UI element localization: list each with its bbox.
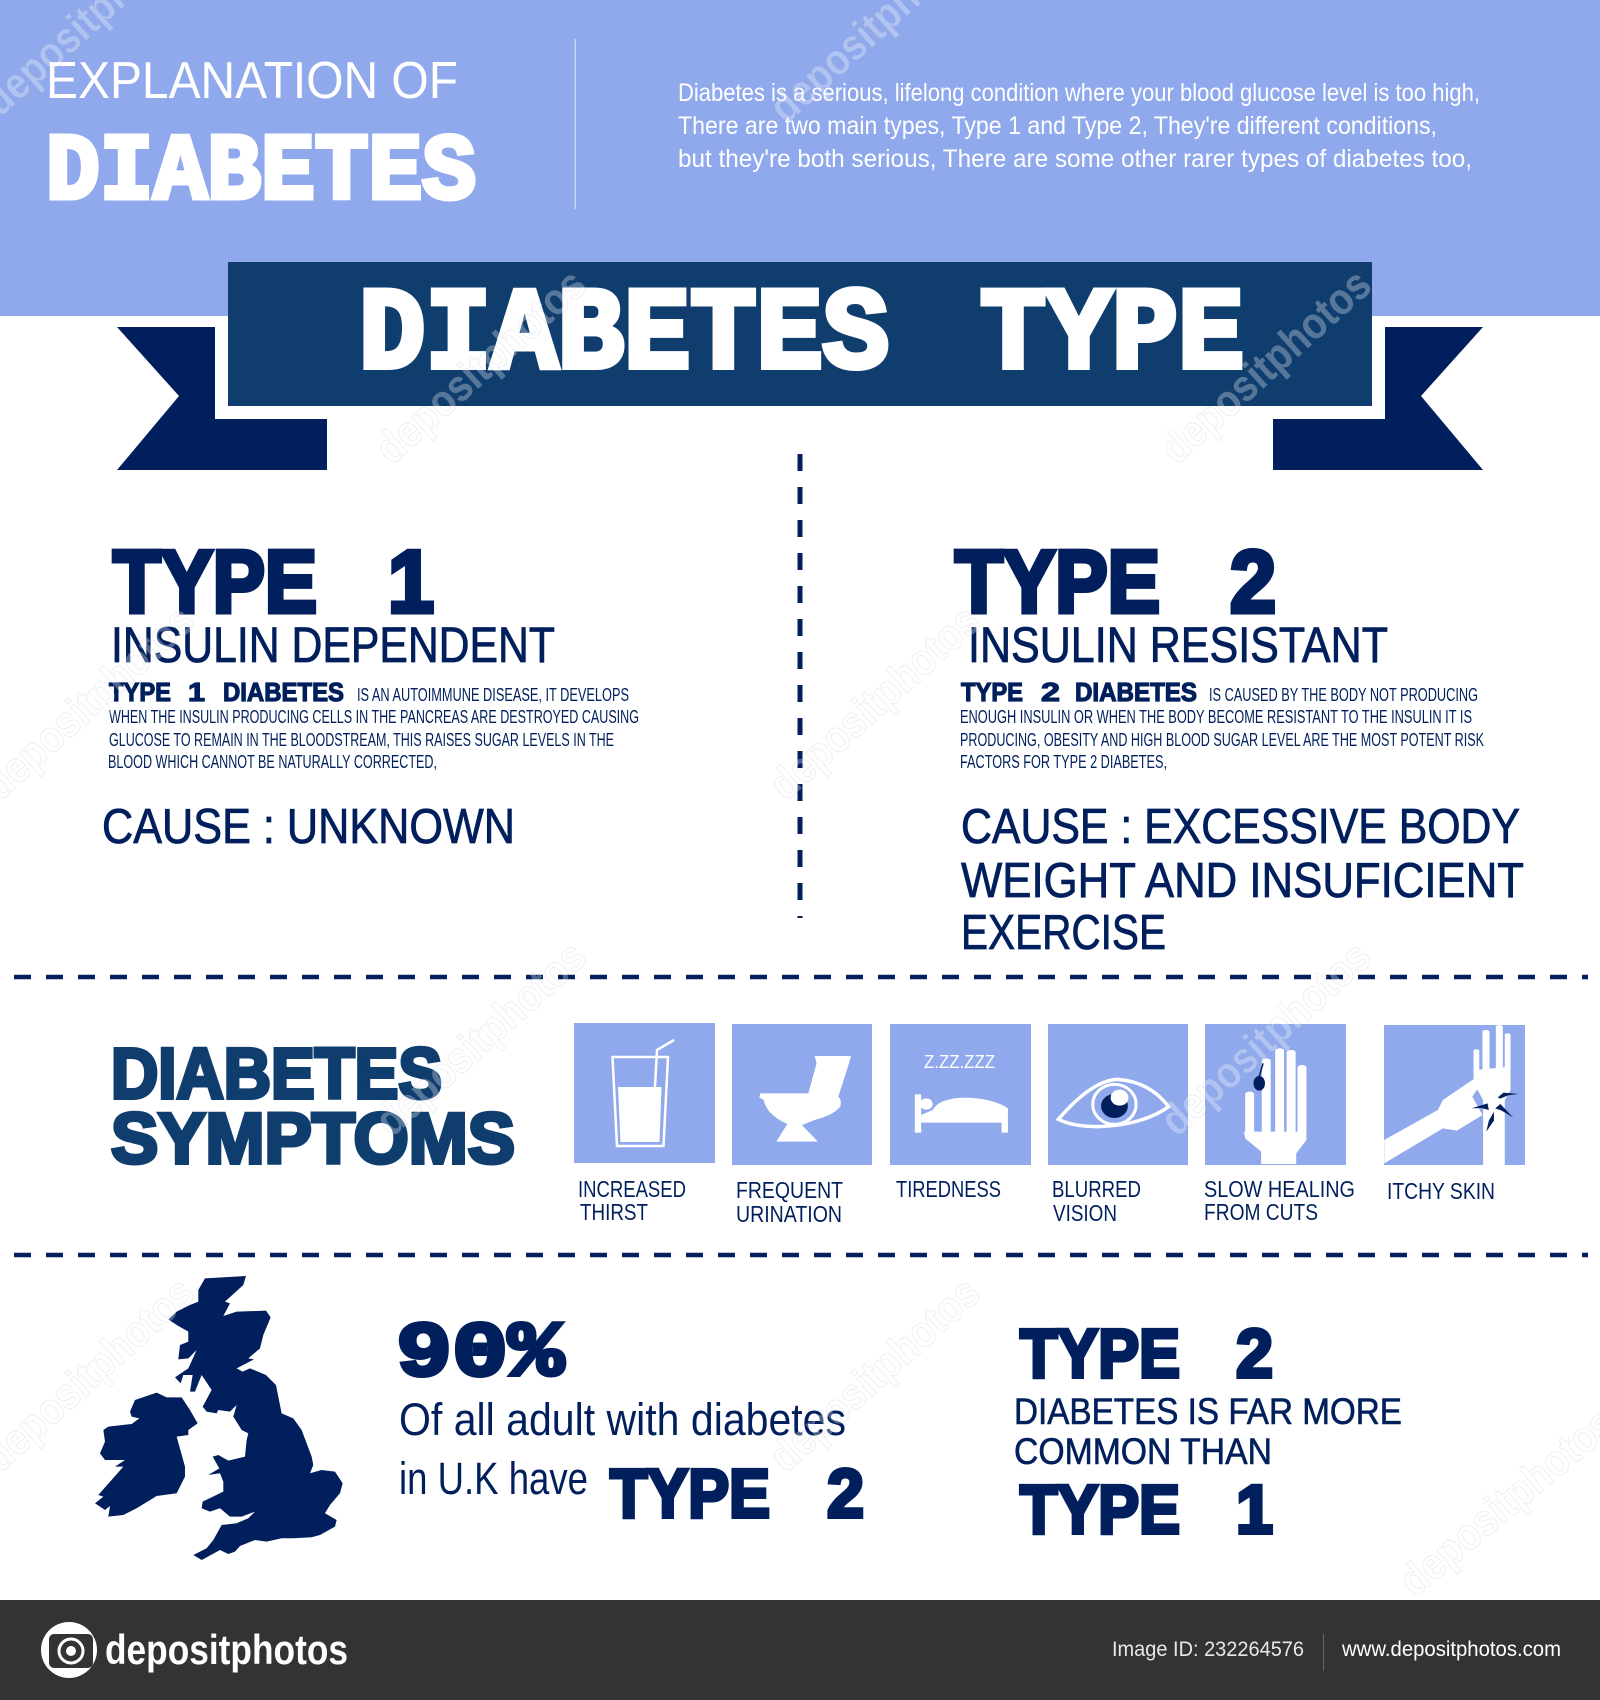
text block: type 2 description: FACTORS FOR TYPE 2 DIABETES, [960, 752, 1167, 772]
heading: type 1: 1 [388, 532, 434, 631]
symptom labels: SLOW HEALING [1204, 1176, 1355, 1202]
text block: type 1 description: IS AN AUTOIMMUNE DISEASE, IT DEVELOPS [357, 685, 629, 705]
text block: introduction: Diabetes is a serious, lifelong condition where your blood glucose level is too high, [678, 79, 1480, 107]
cause: excessive body weight: EXERCISE [961, 906, 1166, 960]
comparison: type 2 vs type 1: DIABETES IS FAR MORE [1014, 1391, 1402, 1432]
statistic: 90 percent: 2 [827, 1455, 864, 1532]
watermark: depositphotos [760, 596, 990, 809]
comparison: type 2 vs type 1: TYPE [1020, 1315, 1180, 1392]
statistic: 90 percent: TYPE [610, 1455, 770, 1532]
text block: introduction [678, 79, 1480, 173]
heading: diabetes symptoms: SYMPTOMS [111, 1100, 515, 1179]
icon: tiredness [890, 1024, 1031, 1165]
text block: type 2 description [960, 677, 1484, 772]
text block: type 1 description: WHEN THE INSULIN PRODUCING CELLS IN THE PANCREAS ARE DESTROYED CAUSING [109, 707, 639, 727]
symptom labels [578, 1176, 1495, 1227]
symptom labels: INCREASED [578, 1176, 686, 1202]
statistic: 90 percent: 90% [396, 1311, 564, 1399]
icon: slow healing [1205, 1024, 1346, 1165]
symptom labels: URINATION [736, 1201, 842, 1227]
footer logotype: depositphotos [105, 1626, 348, 1673]
text block: type 1 description: DIABETES [223, 677, 344, 707]
heading: type 2: 2 [1230, 532, 1276, 631]
text block: type 1 description: TYPE [109, 677, 171, 707]
comparison: type 2 vs type 1 [1014, 1315, 1402, 1548]
cause: excessive body weight: CAUSE : EXCESSIVE BODY [961, 800, 1520, 854]
watermark: depositphotos [366, 932, 596, 1145]
text block: type 1 description: BLOOD WHICH CANNOT BE NATURALLY CORRECTED, [108, 752, 437, 772]
statistic: 90 percent: in U.K have [399, 1453, 588, 1504]
icon: depositphotos logo [41, 1622, 97, 1678]
icon: tiredness: Z.ZZ.ZZZ [924, 1052, 995, 1072]
icon: frequent urination [732, 1024, 872, 1165]
title [46, 52, 476, 227]
text block: type 1 description: GLUCOSE TO REMAIN IN THE BLOODSTREAM, THIS RAISES SUGAR LEVELS IN THE [109, 730, 614, 750]
banner: diabetes type: DIABETES [359, 270, 889, 402]
icon: itchy skin [1384, 1025, 1525, 1165]
comparison: type 2 vs type 1: 2 [1236, 1315, 1273, 1392]
watermark: depositphotos [1151, 260, 1381, 473]
banner: diabetes type [117, 262, 1483, 470]
watermark: depositphotos [366, 260, 596, 473]
text block: type 1 description: 1 [188, 677, 205, 707]
text block: type 2 description: TYPE [961, 677, 1023, 707]
panel: symptoms [111, 1023, 1525, 1227]
subheading: insulin dependent: INSULIN DEPENDENT [111, 617, 555, 673]
statistic: 90 percent: Of all adult with diabetes [399, 1394, 846, 1445]
text block: type 2 description: DIABETES [1075, 677, 1197, 707]
cause: excessive body weight: WEIGHT AND INSUFICIENT [961, 854, 1524, 908]
cause: excessive body weight [961, 800, 1524, 960]
symptom labels: ITCHY SKIN [1387, 1178, 1495, 1204]
panel: header [0, 0, 1600, 316]
icon: increased thirst [574, 1023, 715, 1163]
title: EXPLANATION OF [46, 52, 458, 110]
watermark: depositphotos [760, 1268, 990, 1481]
banner: diabetes type: TYPE [980, 270, 1244, 402]
panel: type 1 [102, 532, 639, 854]
text block: introduction: but they're both serious, There are some other rarer types of diabetes too, [678, 145, 1472, 173]
symptom labels: VISION [1053, 1200, 1117, 1226]
panel: type 2 [955, 532, 1524, 960]
statistic: 90 percent [396, 1311, 864, 1532]
symptom labels: THIRST [580, 1199, 648, 1225]
icon: blurred vision [1048, 1024, 1188, 1165]
cause: unknown: CAUSE : UNKNOWN [102, 800, 515, 854]
comparison: type 2 vs type 1: COMMON THAN [1014, 1431, 1272, 1472]
symptom labels: BLURRED [1052, 1176, 1141, 1202]
website: www.depositphotos.com [1341, 1638, 1561, 1661]
heading: diabetes symptoms [111, 1035, 515, 1179]
text block: type 1 description [108, 677, 639, 772]
text block: type 2 description: 2 [1041, 677, 1060, 707]
symptom labels: TIREDNESS [896, 1176, 1001, 1202]
subheading: insulin resistant: INSULIN RESISTANT [968, 617, 1388, 673]
icon: uk and ireland map [95, 1276, 343, 1560]
heading: type 2: TYPE [955, 532, 1160, 631]
comparison: type 2 vs type 1: TYPE [1020, 1471, 1180, 1548]
text block: introduction: There are two main types, Type 1 and Type 2, They're different conditions, [678, 112, 1437, 140]
comparison: type 2 vs type 1: 1 [1236, 1471, 1273, 1548]
image id: Image ID: 232264576 [1112, 1638, 1304, 1661]
text block: type 2 description: IS CAUSED BY THE BODY NOT PRODUCING [1209, 685, 1478, 705]
heading: type 1: TYPE [113, 532, 317, 631]
title: DIABETES [46, 121, 476, 227]
symptom labels: FROM CUTS [1204, 1199, 1318, 1225]
watermark: depositphotos [1151, 932, 1381, 1145]
heading: diabetes symptoms: DIABETES [111, 1035, 442, 1114]
symptom labels: FREQUENT [736, 1177, 843, 1203]
panel: footer [0, 1600, 1600, 1700]
